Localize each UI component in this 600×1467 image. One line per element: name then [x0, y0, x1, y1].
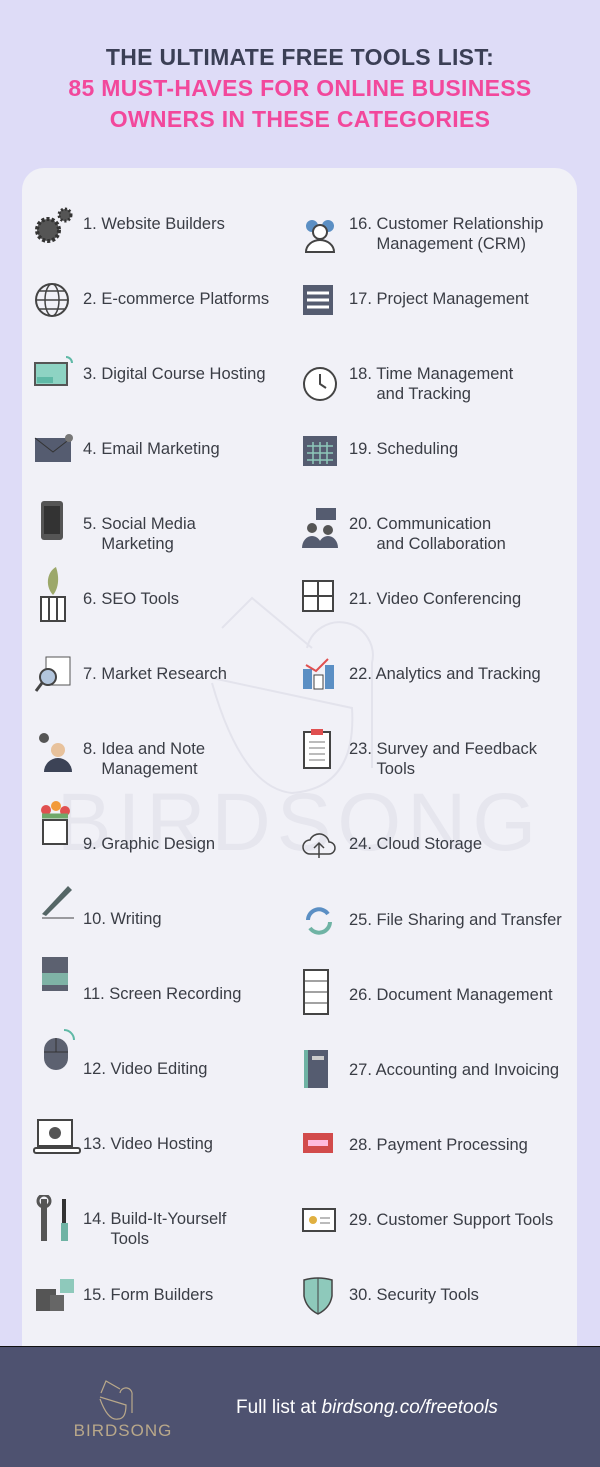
item 29: 29. Customer Support Tools: [349, 1211, 553, 1229]
item 14: [83, 1210, 226, 1248]
item 5: Marketing: [101, 535, 174, 553]
item 3: 3. Digital Course Hosting: [83, 365, 266, 383]
icon: phone: [41, 501, 63, 540]
item 23: [349, 740, 537, 778]
item 27: 27. Accounting and Invoicing: [349, 1061, 559, 1079]
icon: laptop: [34, 356, 73, 386]
item 15: 15. Form Builders: [83, 1286, 213, 1304]
item 5: [83, 515, 196, 553]
icon: tools: [36, 1195, 68, 1241]
item 17: 17. Project Management: [349, 290, 529, 308]
icon: mouse: [44, 1029, 75, 1070]
item 8: 8. Idea and Note: [83, 740, 205, 758]
item 20: and Collaboration: [376, 535, 506, 553]
watermark: BIRDSONG: [57, 777, 542, 868]
item 8: [83, 740, 205, 778]
left column items: [33, 208, 269, 1311]
icon: plant: [40, 567, 66, 622]
item 20: [349, 515, 506, 553]
item 6: 6. SEO Tools: [83, 590, 179, 608]
panel: tools list: [22, 168, 577, 1358]
right column items: [302, 215, 562, 1315]
icon: gears: [35, 208, 72, 243]
title: OWNERS IN THESE CATEGORIES: [110, 106, 490, 132]
icon: screen: [302, 1208, 336, 1232]
item 1: 1. Website Builders: [83, 215, 225, 233]
icon: shield: [302, 1276, 342, 1316]
item 12: 12. Video Editing: [83, 1060, 207, 1078]
icon: window: [302, 580, 334, 612]
item 18: and Tracking: [376, 385, 471, 403]
icon: puzzle: [36, 1279, 74, 1311]
icon: clipboard: [303, 729, 331, 769]
item 22: 22. Analytics and Tracking: [349, 665, 541, 683]
icon: book: [304, 1050, 328, 1088]
item 25: 25. File Sharing and Transfer: [349, 911, 562, 929]
logo: [68, 1375, 178, 1445]
title: THE ULTIMATE FREE TOOLS LIST:: [106, 44, 494, 70]
title: 85 MUST-HAVES FOR ONLINE BUSINESS: [68, 75, 532, 101]
item 10: 10. Writing: [83, 910, 162, 928]
icon: clock: [303, 367, 337, 401]
item 16: [349, 215, 543, 253]
item 8: Management: [101, 760, 198, 778]
icon: globe: [35, 283, 69, 317]
icon: chat people: [302, 508, 338, 548]
item 26: 26. Document Management: [349, 986, 553, 1004]
item 20: 20. Communication: [349, 515, 491, 533]
title: [68, 44, 532, 132]
item 11: 11. Screen Recording: [83, 985, 241, 1003]
icon: list: [303, 285, 333, 315]
item 18: 18. Time Management: [349, 365, 513, 383]
logo: BIRDSONG: [74, 1421, 172, 1440]
cta text: Full list at birdsong.co/freetools: [236, 1397, 498, 1418]
item 23: 23. Survey and Feedback: [349, 740, 537, 758]
icon: pen: [42, 886, 74, 918]
item 28: 28. Payment Processing: [349, 1136, 528, 1154]
item 30: 30. Security Tools: [349, 1286, 479, 1304]
item 7: 7. Market Research: [83, 665, 227, 683]
icon: card: [303, 1133, 333, 1153]
icon: cloud: [302, 833, 336, 858]
item 19: 19. Scheduling: [349, 440, 458, 458]
item 16: Management (CRM): [376, 235, 526, 253]
icon: flowers: [41, 801, 70, 845]
icon: envelope: [34, 434, 73, 462]
icon: people: [305, 220, 335, 253]
icon: idea: [39, 733, 72, 772]
watermark bird: [211, 597, 374, 794]
item 18: [349, 365, 514, 403]
item 13: 13. Video Hosting: [83, 1135, 213, 1153]
item 24: 24. Cloud Storage: [349, 835, 482, 853]
item 21: 21. Video Conferencing: [349, 590, 521, 608]
item 9: 9. Graphic Design: [83, 835, 215, 853]
icon: chart: [303, 658, 334, 690]
item 5: 5. Social Media: [83, 515, 196, 533]
icon: sd card: [42, 957, 68, 991]
item 4: 4. Email Marketing: [83, 440, 220, 458]
item 23: Tools: [376, 760, 415, 778]
item 16: 16. Customer Relationship: [349, 215, 543, 233]
item 14: 14. Build-It-Yourself: [83, 1210, 226, 1228]
footer: [0, 1346, 600, 1467]
item 14: Tools: [110, 1230, 149, 1248]
icon: webcam laptop: [33, 1119, 81, 1154]
icon: calendar: [303, 436, 337, 466]
icon: cabinet: [303, 969, 329, 1015]
icon: magnifier: [34, 656, 70, 692]
item 2: 2. E-commerce Platforms: [83, 290, 269, 308]
icon: sync: [306, 907, 332, 935]
